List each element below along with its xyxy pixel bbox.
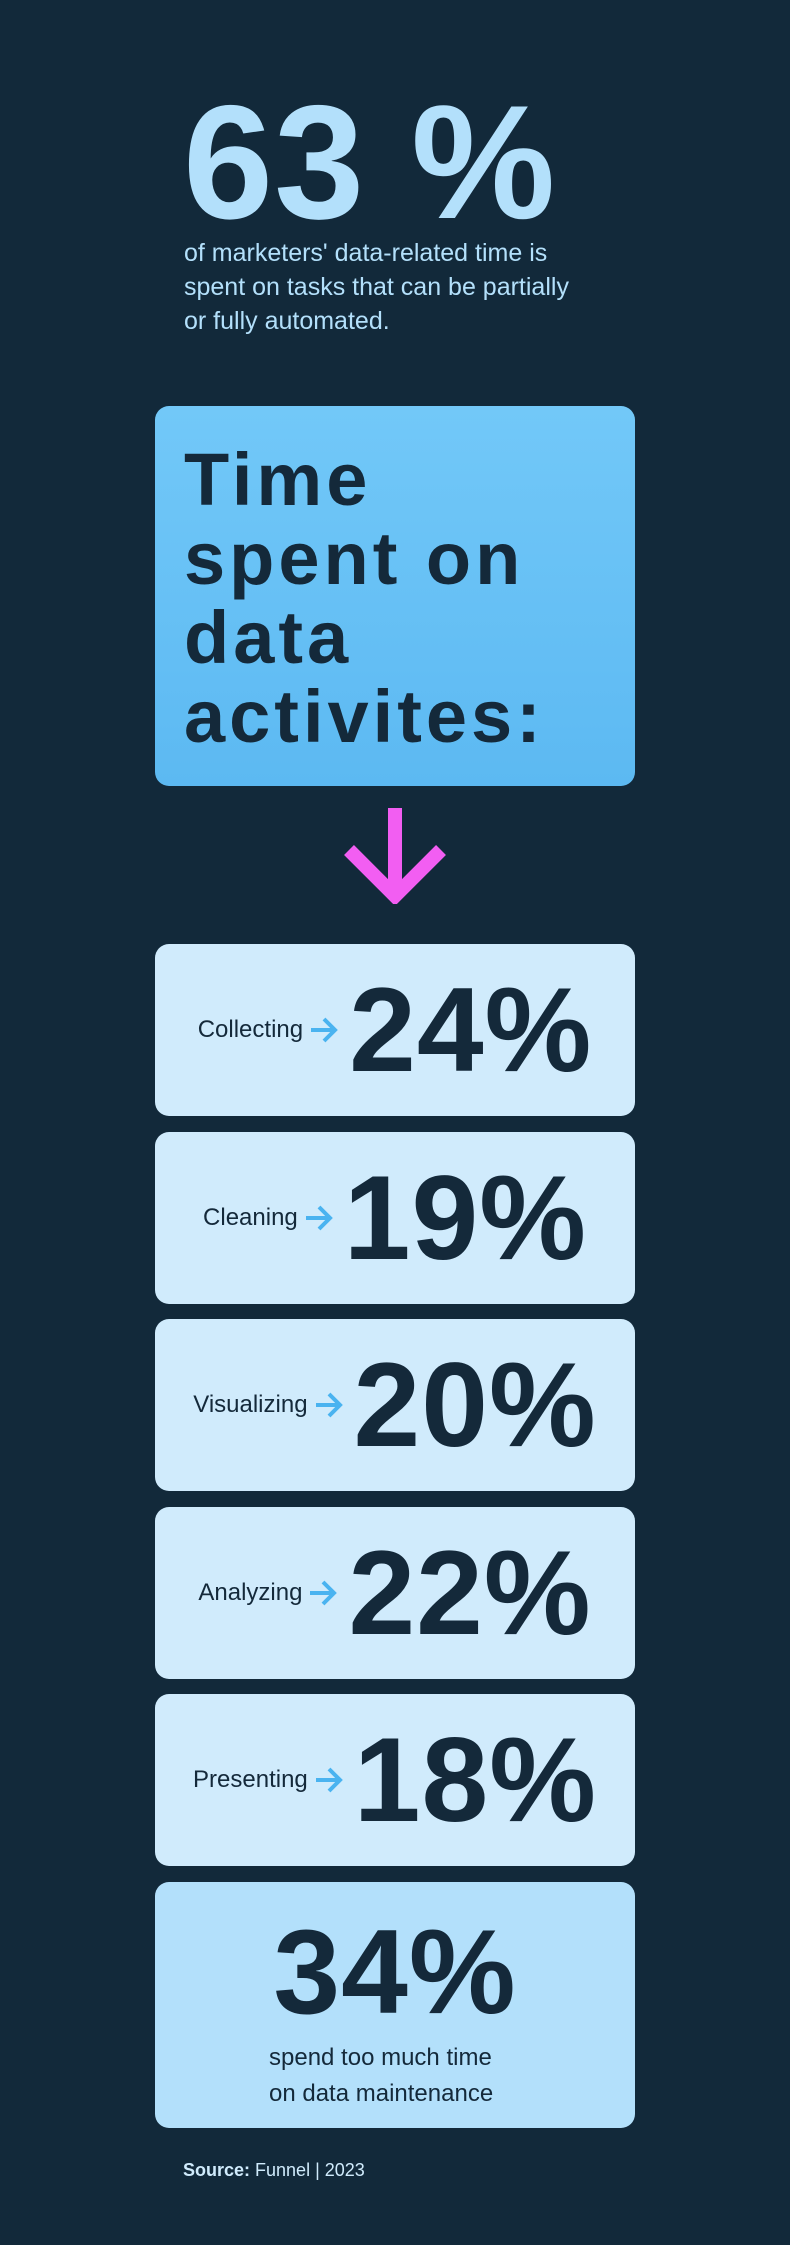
arrow: pink down bbox=[344, 808, 446, 904]
maintenance text bbox=[269, 2044, 493, 2107]
card: collecting bbox=[155, 944, 635, 1116]
subtitle text: of marketers' data-related time is bbox=[184, 239, 547, 267]
card: collecting: 24% bbox=[349, 963, 592, 1097]
card: visualizing: 20% bbox=[354, 1338, 597, 1472]
card: visualizing: Visualizing bbox=[193, 1391, 308, 1418]
subtitle text: or fully automated. bbox=[184, 307, 390, 335]
title text bbox=[184, 438, 545, 758]
card: presenting bbox=[155, 1694, 635, 1866]
headline stat: 63 % bbox=[183, 72, 556, 253]
maintenance text: spend too much time bbox=[269, 2044, 492, 2071]
maintenance text: on data maintenance bbox=[269, 2080, 493, 2107]
card: analyzing: Analyzing bbox=[198, 1579, 302, 1606]
title text: activites: bbox=[184, 675, 545, 758]
card: presenting: Presenting bbox=[193, 1766, 308, 1793]
card: cleaning: Cleaning bbox=[203, 1204, 298, 1231]
card: analyzing: 22% bbox=[348, 1526, 592, 1660]
card: collecting: Collecting bbox=[198, 1016, 303, 1043]
title box bbox=[155, 406, 635, 786]
source: Source: Funnel | 2023 bbox=[183, 2160, 365, 2180]
title text: data bbox=[184, 596, 352, 679]
card: analyzing bbox=[155, 1507, 635, 1679]
title text: Time bbox=[184, 438, 371, 521]
subtitle text: spent on tasks that can be partially bbox=[184, 273, 569, 301]
maintenance number: 34% bbox=[273, 1905, 517, 2039]
card: maintenance stat bbox=[155, 1882, 635, 2128]
card: presenting: 18% bbox=[354, 1713, 597, 1847]
card: cleaning: 19% bbox=[344, 1151, 587, 1285]
subtitle text bbox=[184, 239, 569, 335]
card: cleaning bbox=[155, 1132, 635, 1304]
title text: spent on bbox=[184, 517, 524, 600]
card: visualizing bbox=[155, 1319, 635, 1491]
